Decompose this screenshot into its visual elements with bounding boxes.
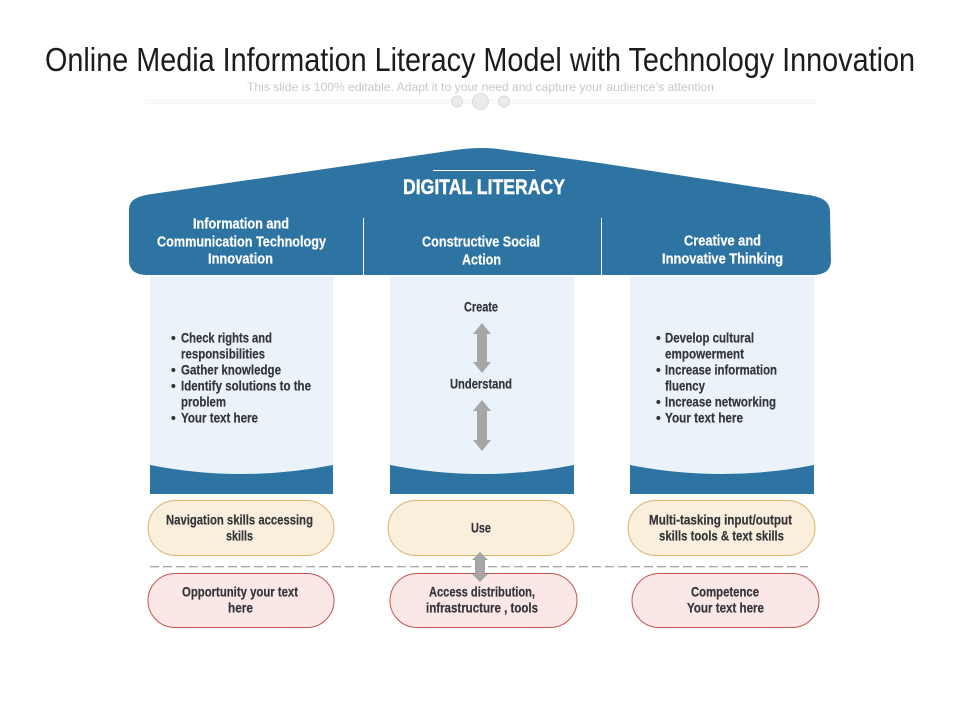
bullet list: column 3: • bbox=[656, 394, 661, 410]
arrow: understand to use bbox=[473, 400, 491, 451]
bullet list: column 1: • bbox=[171, 330, 176, 346]
pill: competence: Competence bbox=[691, 584, 759, 600]
arrow: use to access bbox=[472, 552, 488, 582]
bullet list: column 3: Develop cultural bbox=[665, 330, 754, 346]
heading: column 1: Communication Technology bbox=[157, 234, 326, 250]
heading: column 2: Action bbox=[462, 252, 501, 268]
pill: use: Use bbox=[471, 520, 491, 536]
bullet list: column 1: • bbox=[171, 362, 176, 378]
subtitle: This slide is 100% editable. Adapt it to your need and capture your audience’s attention bbox=[247, 80, 714, 94]
pill: navigation skills: skills bbox=[226, 528, 253, 544]
bullet list: column 1: problem bbox=[181, 394, 226, 410]
heading: column 3 bbox=[662, 234, 783, 268]
bullet list: column 1: • bbox=[171, 410, 176, 426]
label: create: Create bbox=[464, 300, 498, 314]
decorative title divider bbox=[145, 94, 816, 110]
pill: access distribution bbox=[390, 574, 577, 628]
bullet list: column 1: Gather knowledge bbox=[181, 362, 281, 378]
pill: access distribution: infrastructure , tools bbox=[426, 600, 538, 616]
bullet list: column 3 bbox=[656, 330, 777, 426]
heading: column 2 bbox=[422, 234, 540, 268]
bullet list: column 3: empowerment bbox=[665, 346, 744, 362]
pill: use bbox=[388, 500, 574, 556]
bullet list: column 3: • bbox=[656, 330, 661, 346]
panel: roof bbox=[129, 148, 831, 275]
bullet list: column 1: Your text here bbox=[181, 410, 258, 426]
pill: opportunity: Opportunity your text bbox=[182, 584, 298, 600]
heading: column 1 bbox=[157, 216, 326, 268]
bullet list: column 3: • bbox=[656, 410, 661, 426]
bullet list: column 1: responsibilities bbox=[181, 346, 265, 362]
bullet list: column 3: fluency bbox=[665, 378, 705, 394]
heading: column 3: Innovative Thinking bbox=[662, 252, 783, 268]
dashed divider bbox=[150, 566, 808, 568]
bullet list: column 3: Increase information bbox=[665, 362, 777, 378]
pill: navigation skills bbox=[148, 500, 334, 556]
pill: navigation skills: Navigation skills accessing bbox=[166, 512, 313, 528]
heading: column 1: Innovation bbox=[208, 252, 273, 268]
heading: column 3: Creative and bbox=[684, 234, 761, 250]
arrow: create to understand bbox=[473, 323, 491, 373]
pill: competence: Your text here bbox=[687, 600, 764, 616]
bullet list: column 3: Your text here bbox=[665, 410, 743, 426]
pill: multi-tasking: skills tools & text skills bbox=[659, 528, 784, 544]
bullet list: column 3: • bbox=[656, 362, 661, 378]
bullet list: column 1: • bbox=[171, 378, 176, 394]
pill: competence bbox=[632, 574, 819, 628]
heading: column 1: Information and bbox=[193, 216, 289, 232]
bullet list: column 1: Identify solutions to the bbox=[181, 378, 311, 394]
label: understand: Understand bbox=[450, 376, 512, 392]
panel: column 3 bbox=[630, 276, 814, 494]
panel: column 1 bbox=[150, 276, 333, 494]
pill: multi-tasking bbox=[628, 500, 815, 556]
heading: column 2: Constructive Social bbox=[422, 234, 540, 250]
bullet list: column 3: Increase networking bbox=[665, 394, 776, 410]
pill: opportunity: here bbox=[228, 600, 253, 616]
pill: opportunity bbox=[148, 574, 334, 628]
panel: column 2 bbox=[390, 276, 574, 494]
bullet list: column 1 bbox=[171, 330, 311, 426]
pill: access distribution: Access distribution, bbox=[429, 584, 535, 600]
bullet list: column 1: Check rights and bbox=[181, 330, 272, 346]
heading: digital literacy: DIGITAL LITERACY bbox=[403, 175, 565, 199]
pill: multi-tasking: Multi-tasking input/output bbox=[649, 512, 792, 528]
